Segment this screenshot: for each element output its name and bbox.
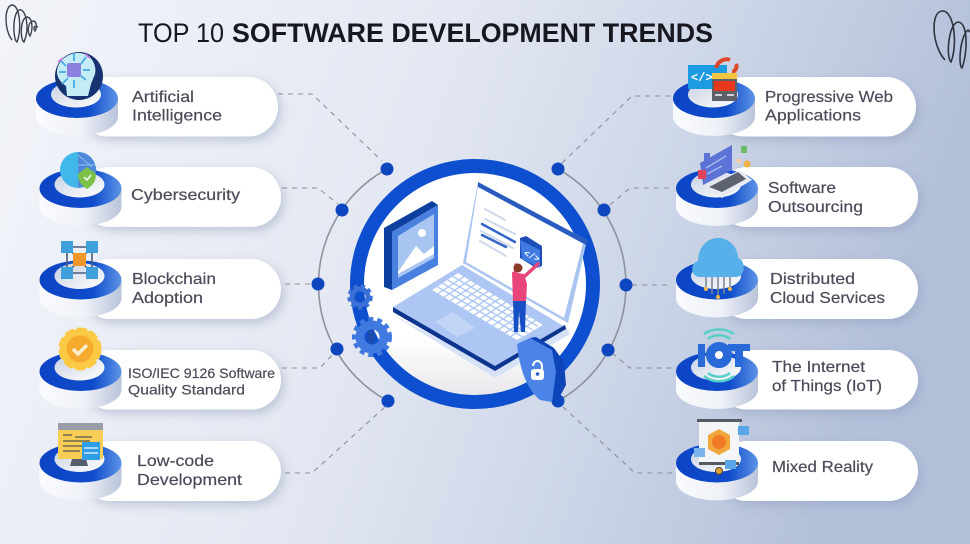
label: Intelligence	[132, 108, 222, 124]
laptop base	[393, 265, 565, 368]
laptop screen	[463, 182, 587, 323]
keyboard	[432, 273, 543, 340]
label: The Internet	[772, 359, 866, 376]
label	[772, 359, 882, 395]
disk	[40, 444, 122, 500]
item: Software Outsourcing	[676, 145, 918, 227]
person	[512, 264, 538, 332]
label: of Things (IoT)	[772, 378, 882, 395]
disk	[676, 260, 758, 317]
item: Artificial Intelligence	[36, 52, 278, 136]
icon: AI head globe	[55, 52, 103, 100]
label: Mixed Reality	[772, 459, 873, 476]
disk	[40, 169, 122, 226]
item: Mixed Reality	[676, 419, 918, 501]
icon: quality badge	[60, 329, 100, 369]
code card: </>	[522, 249, 541, 265]
item: ISO/IEC 9126	[40, 329, 281, 410]
item: Blockchain Adoption	[40, 241, 281, 319]
pill	[80, 350, 281, 410]
label: Blockchain	[132, 271, 216, 288]
icon: mixed reality board	[694, 419, 749, 474]
pill	[80, 167, 281, 227]
gears	[349, 286, 390, 355]
label: Quality Standard	[128, 382, 245, 398]
pill	[717, 259, 918, 319]
title: SOFTWARE DEVELOPMENT TRENDS	[232, 18, 713, 48]
label: Low-code	[137, 453, 214, 470]
orbit dots	[312, 162, 632, 408]
blue ring	[357, 166, 593, 402]
orbit arcs	[318, 169, 626, 401]
label	[770, 271, 885, 307]
disk	[676, 169, 758, 226]
label: ISO/IEC 9126 Software	[128, 365, 275, 381]
pill	[714, 77, 916, 136]
spiral doodle: top right	[934, 11, 970, 68]
label: Cybersecurity	[131, 187, 240, 204]
label	[132, 89, 222, 124]
pill	[80, 259, 281, 319]
label	[137, 453, 243, 489]
label: Cloud Services	[770, 290, 885, 307]
item: Distributed Cloud Services	[676, 238, 918, 319]
item: Cybersecurity	[40, 152, 281, 227]
label: Progressive Web	[765, 89, 893, 106]
label: Outsourcing	[768, 199, 863, 216]
icon: blockchain	[61, 241, 98, 279]
label	[128, 365, 275, 398]
label: Applications	[765, 108, 861, 124]
label: Artificial	[132, 89, 194, 106]
label: Distributed	[770, 271, 855, 288]
icon: IoT	[698, 330, 750, 381]
connector network	[278, 94, 672, 473]
disk	[40, 260, 122, 317]
central illustration	[349, 166, 593, 402]
item: Internet of Things	[676, 330, 918, 410]
screen lines	[480, 209, 515, 256]
item: Progressive Web Applications	[673, 59, 916, 136]
trackpad	[435, 312, 475, 337]
picture frame	[384, 201, 438, 290]
icon: outsourcing laptop	[698, 145, 752, 198]
disk	[36, 79, 118, 136]
label	[768, 180, 863, 216]
pill	[717, 167, 918, 227]
icon: cloud	[692, 238, 744, 299]
item: Low-code Development	[40, 423, 281, 501]
shield with lock	[517, 337, 566, 402]
icon: globe with shield	[60, 152, 96, 189]
label: Software	[768, 180, 836, 197]
pill	[717, 350, 918, 410]
title: TOP 10	[138, 18, 224, 48]
icon: code monitor	[58, 423, 103, 466]
laptop	[393, 182, 587, 378]
disk	[676, 352, 758, 409]
pill	[80, 441, 281, 501]
disk	[40, 352, 122, 409]
dashed connectors	[278, 94, 672, 473]
spiral doodle: top left	[6, 5, 38, 42]
icon: web apps	[688, 59, 737, 101]
disk	[676, 444, 758, 500]
label: Adoption	[132, 290, 203, 307]
label	[765, 89, 893, 124]
pill	[717, 441, 918, 501]
label: Development	[137, 472, 243, 489]
label	[132, 271, 216, 307]
pill	[78, 77, 278, 136]
laptop shadow	[393, 315, 570, 378]
icon: web apps: </>	[691, 71, 713, 85]
code card	[520, 236, 542, 268]
disk	[673, 79, 755, 136]
